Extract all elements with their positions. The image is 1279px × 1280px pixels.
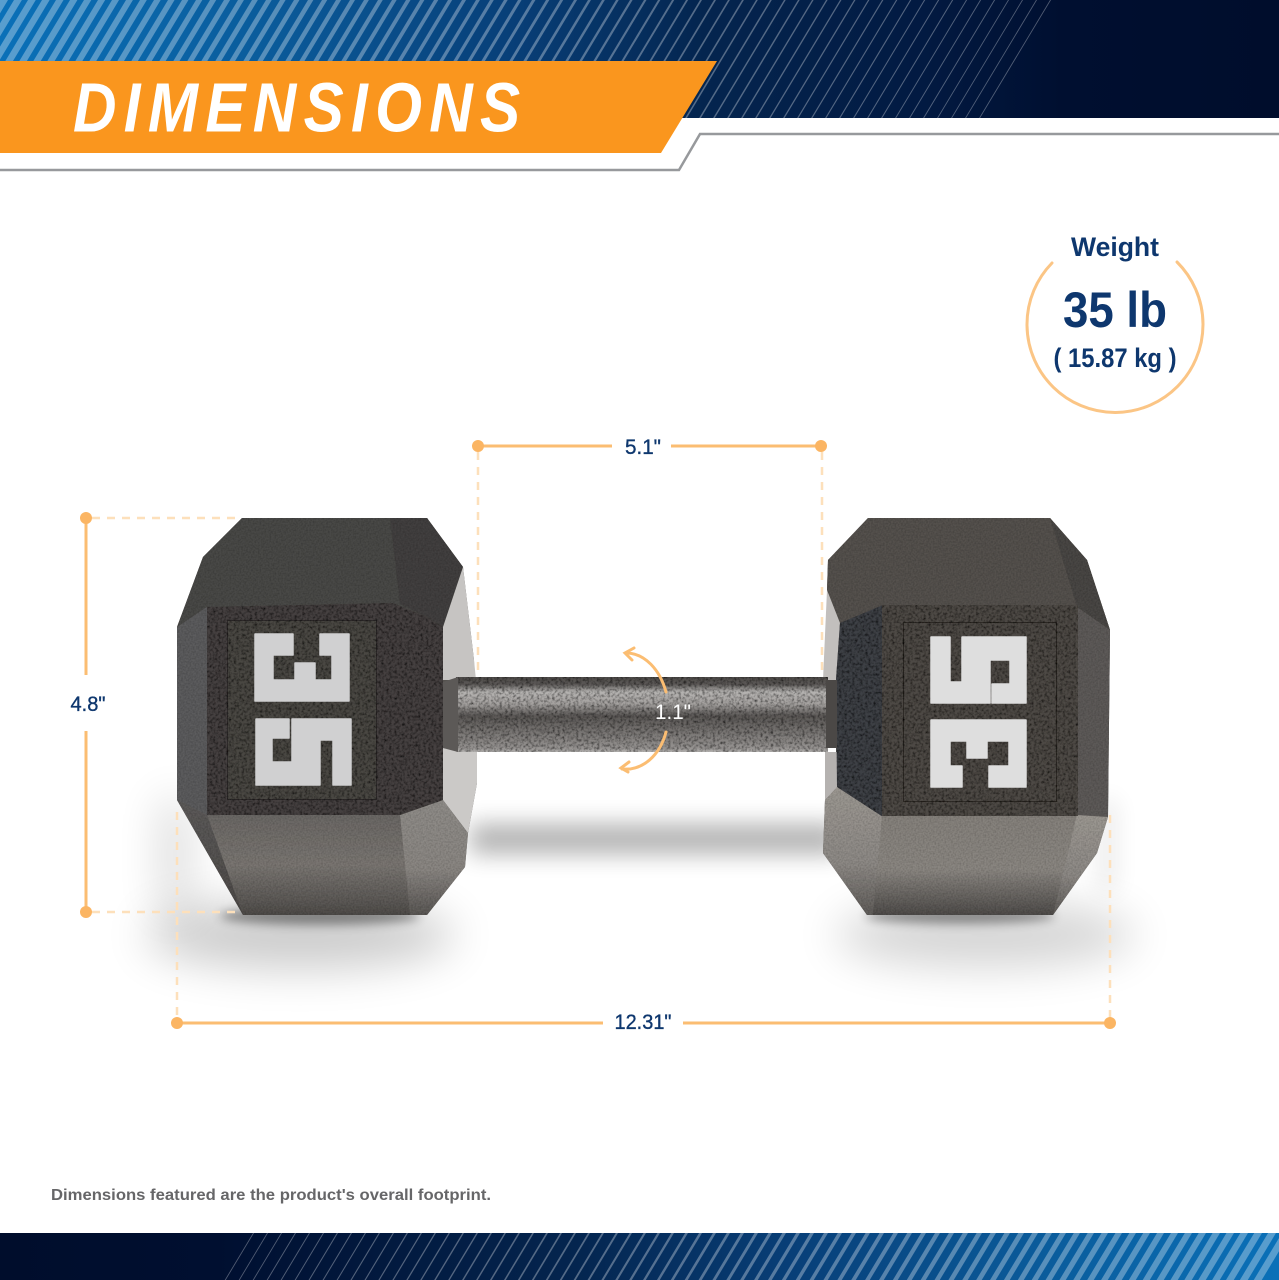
handle: [443, 677, 837, 752]
left face: [207, 603, 443, 815]
title banner: [0, 61, 717, 153]
overall line: [177, 1022, 1110, 1024]
dimension height: [70, 512, 106, 918]
diameter lower arrow: [621, 732, 666, 772]
handle diameter: [621, 648, 691, 772]
header band: [0, 0, 1279, 118]
left digit 3: [255, 634, 349, 701]
diameter upper arrow: [625, 648, 666, 692]
dimension guides dashed: [92, 452, 1110, 1018]
height line: [84, 518, 88, 912]
diameter label: 1.1": [655, 701, 691, 724]
handle length line: [478, 444, 821, 448]
right face: [882, 605, 1078, 816]
title: DIMENSIONS: [73, 68, 520, 147]
height label: 4.8": [70, 693, 106, 716]
left head: [177, 518, 477, 915]
weight value kg: ( 15.87 kg ): [1054, 343, 1176, 373]
header outline rule: [0, 134, 1279, 170]
overall dots: [171, 1017, 1116, 1029]
footnote: Dimensions featured are the product's overall footprint.: [51, 1187, 491, 1204]
left digit 5: [256, 719, 351, 785]
right digit 5: [931, 637, 1026, 703]
handle length dots: [472, 440, 827, 452]
weight value lb: 35 lb: [1063, 282, 1167, 338]
footer band: [0, 1233, 1279, 1280]
right head: [823, 518, 1110, 915]
dimension handle length: [472, 436, 827, 459]
overall label: 12.31": [614, 1011, 672, 1034]
height dots: [80, 512, 92, 918]
weight badge: [1027, 232, 1203, 412]
right digit 3: [931, 720, 1026, 787]
dimension overall length: [171, 1011, 1116, 1034]
floor shadow: [145, 800, 1135, 969]
weight ring: [1027, 262, 1203, 412]
handle length label: 5.1": [625, 436, 661, 459]
weight label: Weight: [1071, 232, 1159, 262]
dumbbell: [177, 518, 1110, 915]
